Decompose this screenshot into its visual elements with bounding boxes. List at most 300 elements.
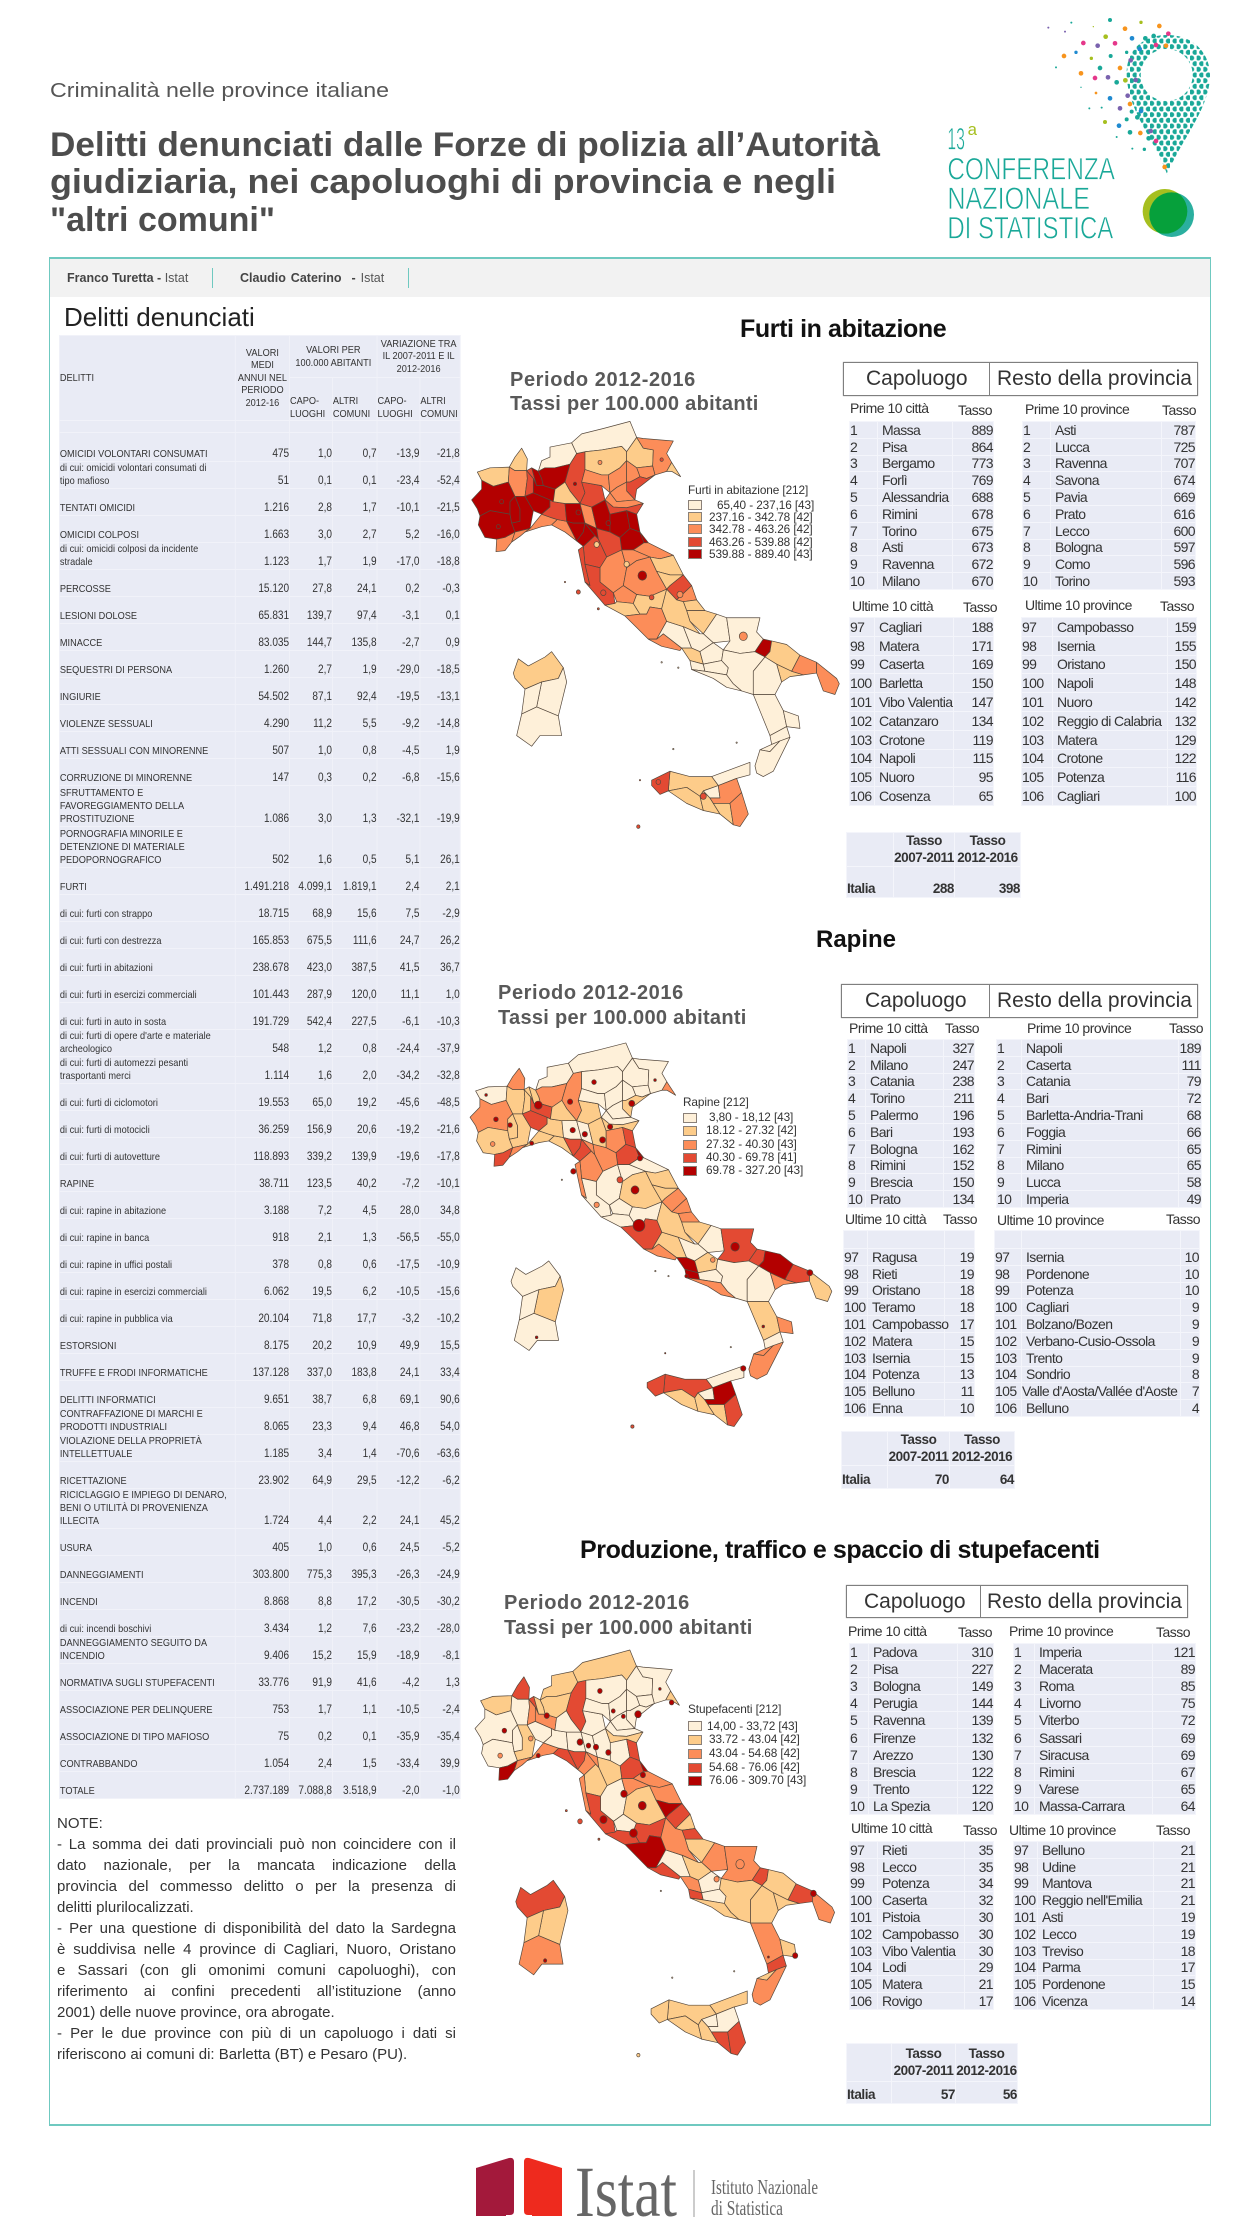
table: prime 10 province rapine: Foggia [1026, 1124, 1065, 1140]
table: prime 10 province stupefacenti: 65 [1181, 1781, 1195, 1797]
table: prime 10 città rapine: 162 [952, 1141, 974, 1157]
table: delitti denunciati: -2,7 [402, 637, 420, 649]
table: delitti denunciati: 1,9 [363, 664, 377, 676]
table: delitti denunciati: 7,5 [406, 908, 420, 920]
map caption: stupefacenti: Periodo 2012-2016 [504, 1592, 690, 1614]
table: ultime 10 province furti: Cagliari [1057, 788, 1100, 804]
table: prime 10 province furti [1022, 421, 1196, 590]
table: ultime 10 province furti: 100 [1174, 788, 1196, 804]
table: prime 10 province stupefacenti: 6 [1014, 1730, 1021, 1746]
headers: prime 10 furti [850, 400, 1196, 418]
table: delitti denunciati: -13,9 [397, 448, 420, 460]
table: ultime 10 città rapine: 102 [844, 1333, 866, 1349]
table: delitti denunciati: -14,8 [437, 718, 460, 730]
notes: e Sassari (con gli omonimi comuni capoluoghi), con [57, 1962, 456, 1979]
table: ultime 10 province stupefacenti: 14 [1181, 1993, 1195, 2009]
table: delitti denunciati: 2,1 [318, 1232, 332, 1244]
table: prime 10 province stupefacenti: Roma [1039, 1678, 1074, 1694]
table: ultime 10 province rapine: Sondrio [1026, 1366, 1070, 1382]
table: ultime 10 province stupefacenti: Asti [1042, 1909, 1063, 1925]
table: prime 10 province rapine: 2 [997, 1057, 1004, 1073]
table: prime 10 città stupefacenti: 7 [850, 1747, 857, 1763]
table: prime 10 province furti: 616 [1173, 506, 1195, 522]
table: delitti denunciati: 91,9 [312, 1677, 332, 1689]
table: prime 10 città rapine: 211 [953, 1090, 974, 1106]
table: ultime 10 città rapine [843, 1230, 975, 1417]
table: delitti denunciati: 137.128 [253, 1367, 289, 1379]
headers: ultime 10 furti: Tasso [963, 599, 997, 615]
table: ultime 10 province furti: 132 [1174, 713, 1196, 729]
map caption: furti [510, 369, 759, 415]
headers: ultime 10 rapine: Ultime 10 città [845, 1211, 926, 1227]
table: delitti denunciati: 1.724 [264, 1515, 289, 1527]
headers: ultime 10 stupefacenti: Tasso [1156, 1822, 1190, 1838]
table: prime 10 città furti: 1 [850, 422, 857, 438]
table: delitti denunciati: 542,4 [307, 1016, 332, 1028]
table: delitti denunciati: -55,0 [437, 1232, 460, 1244]
table: prime 10 città furti: 3 [850, 455, 857, 471]
table: delitti denunciati: -10,5 [397, 1286, 420, 1298]
table: delitti denunciati: VARIAZIONE TRA [381, 338, 456, 350]
table: ultime 10 città stupefacenti: 105 [850, 1976, 872, 1992]
table: delitti denunciati: CONTRAFFAZIONE DI MARCHI E [60, 1408, 203, 1420]
table: prime 10 città rapine: Milano [870, 1057, 908, 1073]
table: prime 10 città rapine: 4 [848, 1090, 855, 1106]
table: ultime 10 città stupefacenti: 103 [850, 1943, 872, 1959]
table: prime 10 province stupefacenti: 72 [1181, 1712, 1195, 1728]
table: ultime 10 città stupefacenti: Matera [882, 1976, 922, 1992]
map: furti in abitazione [471, 421, 840, 829]
table: delitti denunciati: 1,6 [318, 1070, 332, 1082]
table: ultime 10 città rapine: 15 [960, 1333, 974, 1349]
table: prime 10 province stupefacenti: 75 [1181, 1695, 1195, 1711]
table: prime 10 città furti: Torino [882, 523, 917, 539]
table: delitti denunciati: di cui: furti in esercizi commerciali [60, 989, 197, 1001]
table: delitti denunciati: 29,5 [357, 1475, 377, 1487]
table: ultime 10 province furti: 100 [1022, 675, 1044, 691]
table: prime 10 città furti: 8 [850, 539, 857, 555]
table: prime 10 città stupefacenti: Ravenna [873, 1712, 925, 1728]
table: ultime 10 province rapine: 4 [1192, 1400, 1199, 1416]
table: delitti denunciati: 2,7 [318, 664, 332, 676]
table: tasso italia stupefacenti: 56 [1003, 2086, 1017, 2102]
table: prime 10 città stupefacenti: Brescia [873, 1764, 915, 1780]
table: delitti denunciati: -10,1 [437, 1178, 460, 1190]
table: prime 10 province furti: Prato [1055, 506, 1085, 522]
table: prime 10 città rapine: 193 [952, 1124, 974, 1140]
table: delitti denunciati: 8.868 [264, 1596, 289, 1608]
table: ultime 10 città furti: Crotone [879, 732, 925, 748]
table: prime 10 province stupefacenti: 5 [1014, 1712, 1021, 1728]
notes: dato nazionale, per la mancata indicazione della [57, 1857, 456, 1874]
table: prime 10 province rapine: Catania [1026, 1073, 1070, 1089]
table: ultime 10 città furti: 105 [850, 769, 872, 785]
table: ultime 10 città furti: 98 [850, 638, 864, 654]
table: delitti denunciati: 1,0 [446, 989, 460, 1001]
logo: istat: di Statistica [711, 2196, 783, 2220]
table: ultime 10 province stupefacenti: 21 [1181, 1859, 1195, 1875]
map caption: rapine [498, 982, 747, 1029]
table: ultime 10 province rapine: Valle d'Aosta/Vallée d'Aoste [1022, 1383, 1177, 1399]
table: delitti denunciati: 2,7 [363, 529, 377, 541]
table: delitti denunciati: -33,4 [397, 1758, 420, 1770]
table: prime 10 città stupefacenti: Perugia [873, 1695, 917, 1711]
table: delitti denunciati: 3,4 [318, 1448, 332, 1460]
table: delitti denunciati: 139,7 [307, 610, 332, 622]
table: prime 10 province stupefacenti: 1 [1014, 1644, 1021, 1660]
table: prime 10 città furti: 773 [971, 455, 993, 471]
legend: furti [688, 483, 814, 561]
table: delitti denunciati: ILLECITA [60, 1515, 99, 1527]
table: ultime 10 città stupefacenti: 35 [979, 1859, 993, 1875]
table: ultime 10 province rapine [994, 1230, 1200, 1417]
table: prime 10 province furti: Como [1055, 556, 1090, 572]
table: tasso italia furti: Italia [847, 880, 875, 896]
legend: rapine: Rapine [212] [683, 1095, 749, 1109]
table: prime 10 province stupefacenti: Rimini [1039, 1764, 1074, 1780]
table: prime 10 province stupefacenti: 10 [1014, 1798, 1028, 1814]
table: prime 10 città rapine: 134 [952, 1191, 974, 1207]
table: delitti denunciati: 2,8 [318, 502, 332, 514]
table: ultime 10 città furti: 119 [972, 732, 993, 748]
table: delitti denunciati: 405 [272, 1542, 289, 1554]
table: delitti denunciati: 0,1 [318, 475, 332, 487]
table: ultime 10 province stupefacenti: Pordenone [1042, 1976, 1105, 1992]
table: delitti denunciati: 3,0 [318, 529, 332, 541]
table: tasso italia furti: 2007-2011 [894, 850, 954, 864]
table: prime 10 province rapine: Barletta-Andria-Trani [1026, 1107, 1143, 1123]
table: ultime 10 province stupefacenti [1013, 1841, 1196, 2010]
table: prime 10 città stupefacenti: 122 [971, 1764, 993, 1780]
table: delitti denunciati: ASSOCIAZIONE PER DELINQUERE [60, 1704, 213, 1716]
table: delitti denunciati: RAPINE [60, 1178, 94, 1190]
table: ultime 10 province stupefacenti: 17 [1181, 1959, 1195, 1975]
table: delitti denunciati: -30,5 [397, 1596, 420, 1608]
table: tasso italia rapine: 2012-2016 [952, 1448, 1012, 1464]
table: delitti denunciati: -4,2 [402, 1677, 420, 1689]
table: ultime 10 province furti: 97 [1022, 619, 1036, 635]
legend: rapine [683, 1095, 803, 1177]
legend: stupefacenti: 33.72 - 43.04 [42] [709, 1732, 800, 1746]
table: delitti denunciati: di cui: rapine in banca [60, 1232, 149, 1244]
table: ultime 10 province rapine: 9 [1192, 1316, 1199, 1332]
table: ultime 10 province stupefacenti: 21 [1181, 1875, 1195, 1891]
table: prime 10 province furti: 10 [1023, 573, 1037, 589]
table: tasso italia furti [846, 832, 1021, 898]
icon: map pin of dots [1127, 35, 1210, 175]
table: delitti denunciati: 8.065 [264, 1421, 289, 1433]
table: delitti denunciati: 3,0 [318, 813, 332, 825]
table: ultime 10 città rapine: 103 [844, 1350, 866, 1366]
table: ultime 10 province furti: Isernia [1057, 638, 1095, 654]
table: delitti denunciati: 918 [272, 1232, 289, 1244]
table: tasso italia rapine: Tasso [901, 1432, 936, 1447]
table: delitti denunciati: COMUNI [420, 408, 458, 420]
table: tasso italia stupefacenti: Italia [847, 2086, 875, 2102]
table: ultime 10 città furti: 147 [971, 694, 993, 710]
legend: furti: 463.26 - 539.88 [42] [709, 535, 813, 549]
table: delitti denunciati: 54.502 [258, 691, 289, 703]
table: ultime 10 città furti: 106 [850, 788, 872, 804]
table: ultime 10 città rapine: Isernia [872, 1350, 910, 1366]
table: ultime 10 città stupefacenti: Vibo Valentia [882, 1943, 955, 1959]
table: ultime 10 province stupefacenti: Vicenza [1042, 1993, 1087, 2009]
table: prime 10 città furti: Pisa [882, 439, 907, 455]
table: delitti denunciati: 6,2 [363, 1286, 377, 1298]
notes: - Per le due province con più di un capoluogo i dati si [57, 2025, 456, 2042]
table: delitti denunciati: 2,0 [363, 1070, 377, 1082]
legend: stupefacenti [688, 1702, 806, 1787]
table: delitti denunciati: -3,1 [402, 610, 420, 622]
table: delitti denunciati: 34,8 [440, 1205, 460, 1217]
table: ultime 10 province furti: Potenza [1057, 769, 1104, 785]
table: ultime 10 città stupefacenti: Rieti [882, 1842, 907, 1858]
table: delitti denunciati: 1.123 [264, 556, 289, 568]
table: prime 10 province furti: Asti [1055, 422, 1076, 438]
table: ultime 10 province rapine: 10 [1185, 1282, 1199, 1298]
logo: conferenza nazionale di statistica [947, 18, 1210, 245]
table: delitti denunciati: 1.663 [264, 529, 289, 541]
title: Delitti denunciati dalle Forze di polizia all’Autorità [50, 126, 880, 164]
table: ultime 10 città stupefacenti: 32 [979, 1892, 993, 1908]
table: delitti denunciati: 101.443 [253, 989, 289, 1001]
table: tasso italia rapine: Italia [842, 1472, 870, 1486]
table: tasso italia furti: 398 [999, 880, 1020, 896]
table: ultime 10 province stupefacenti: 19 [1181, 1909, 1195, 1925]
table: ultime 10 città rapine: 105 [844, 1383, 866, 1399]
table: delitti denunciati: 54,0 [440, 1421, 460, 1433]
table: prime 10 province furti: 707 [1173, 455, 1195, 471]
table: delitti denunciati: -0,3 [442, 583, 460, 595]
table: delitti denunciati: DANNEGGIAMENTO SEGUITO DA [60, 1637, 207, 1649]
table: ultime 10 città stupefacenti: 30 [979, 1909, 993, 1925]
table: prime 10 province stupefacenti: 69 [1181, 1747, 1195, 1763]
table: delitti denunciati: 36,7 [440, 962, 460, 974]
table: tasso italia furti: Tasso [906, 833, 942, 848]
table: prime 10 province furti: 7 [1023, 523, 1030, 539]
table: ultime 10 province rapine: Belluno [1026, 1400, 1069, 1416]
table: delitti denunciati: 1,4 [363, 1448, 377, 1460]
table: ultime 10 province rapine: Pordenone [1026, 1266, 1089, 1282]
table: ultime 10 province rapine: 101 [995, 1316, 1017, 1332]
authors strip: Claudio Caterino - Istat [240, 271, 384, 285]
table: prime 10 province furti: 725 [1173, 439, 1195, 455]
table: delitti denunciati: -19,9 [437, 813, 460, 825]
map: stupefacenti [474, 1650, 835, 2058]
table: ultime 10 province stupefacenti: Udine [1042, 1859, 1076, 1875]
table: delitti denunciati: di cui: furti di autovetture [60, 1151, 160, 1163]
table: delitti denunciati: LUOGHI [378, 408, 413, 420]
table: ultime 10 città furti: 134 [971, 713, 993, 729]
map caption: furti: Periodo 2012-2016 [510, 369, 696, 391]
table: ultime 10 province rapine: 97 [995, 1249, 1009, 1265]
table: delitti denunciati: -10,9 [437, 1259, 460, 1271]
table: prime 10 province furti: 597 [1173, 539, 1195, 555]
legend: furti: 65,40 - 237,16 [43] [717, 498, 814, 512]
table: tasso italia stupefacenti: Tasso [969, 2046, 1004, 2061]
table: delitti denunciati: RICICLAGGIO E IMPIEGO DI DENARO, [60, 1489, 227, 1501]
button: capoluogo resto della provincia [843, 362, 1198, 396]
table: ultime 10 province stupefacenti: Parma [1042, 1959, 1080, 1975]
table: delitti denunciati: 339,2 [307, 1151, 332, 1163]
table: prime 10 città rapine: Rimini [870, 1157, 905, 1173]
table: delitti denunciati: 502 [272, 854, 289, 866]
table: ultime 10 province furti: 142 [1174, 694, 1196, 710]
table: delitti denunciati: 1.185 [264, 1448, 289, 1460]
table: delitti denunciati: -70,6 [397, 1448, 420, 1460]
table: ultime 10 città rapine: 18 [960, 1282, 974, 1298]
table: delitti denunciati: 41,5 [400, 962, 420, 974]
table: ultime 10 province rapine: Trento [1026, 1350, 1062, 1366]
table: prime 10 province furti: 2 [1023, 439, 1030, 455]
table: ultime 10 città rapine: 104 [844, 1366, 866, 1382]
table: delitti denunciati: 15,2 [312, 1650, 332, 1662]
notes: riferimento ai confini precedenti all’istituzione (anno [57, 1983, 456, 2000]
table: delitti denunciati: di cui: furti con strappo [60, 908, 152, 920]
table: delitti denunciati: -18,8 [437, 556, 460, 568]
headers: prime 10 stupefacenti: Tasso [958, 1624, 992, 1640]
table: prime 10 province furti: 669 [1173, 489, 1195, 505]
table: prime 10 province stupefacenti: Viterbo [1039, 1712, 1079, 1728]
table: prime 10 città rapine: 2 [848, 1057, 855, 1073]
table: delitti denunciati: 1,2 [318, 1623, 332, 1635]
table: delitti denunciati: VALORI [246, 347, 279, 359]
table: delitti denunciati: 1,5 [363, 1758, 377, 1770]
table: ultime 10 province rapine: Verbano-Cusio-Ossola [1026, 1333, 1155, 1349]
table: ultime 10 città stupefacenti: 98 [850, 1859, 864, 1875]
table: ultime 10 province rapine: Potenza [1026, 1282, 1073, 1298]
headers: ultime 10 furti: Ultime 10 città [852, 598, 933, 614]
table: prime 10 città stupefacenti: Bologna [873, 1678, 920, 1694]
table: ultime 10 province stupefacenti: 101 [1014, 1909, 1036, 1925]
table: delitti denunciati: 9,4 [363, 1421, 377, 1433]
table: ultime 10 province stupefacenti: Treviso [1042, 1943, 1083, 1959]
table: delitti denunciati: INTELLETTUALE [60, 1448, 132, 1460]
table: prime 10 città furti: 864 [971, 439, 993, 455]
table: ultime 10 province stupefacenti: Lecco [1042, 1926, 1076, 1942]
table: delitti denunciati: 507 [272, 745, 289, 757]
table: delitti denunciati: -6,8 [402, 772, 420, 784]
table: ultime 10 città stupefacenti: 30 [979, 1943, 993, 1959]
panel border [49, 257, 1211, 2126]
table: prime 10 città furti: 889 [971, 422, 993, 438]
table: delitti denunciati: 8.175 [264, 1340, 289, 1352]
legend: furti: 237.16 - 342.78 [42] [709, 510, 813, 524]
table: prime 10 province furti: 3 [1023, 455, 1030, 471]
table: prime 10 province furti: Bologna [1055, 539, 1102, 555]
table: ultime 10 province stupefacenti: 103 [1014, 1943, 1036, 1959]
table: delitti denunciati: 24,1 [400, 1367, 420, 1379]
headers: ultime 10 rapine: Ultime 10 province [997, 1212, 1104, 1228]
headers: prime 10 rapine: Tasso [945, 1020, 979, 1036]
table: delitti denunciati: di cui: furti di ciclomotori [60, 1097, 158, 1109]
table: ultime 10 città furti: 102 [850, 713, 872, 729]
table: delitti denunciati: -37,9 [437, 1043, 460, 1055]
table: delitti denunciati: 1,3 [363, 1232, 377, 1244]
table: delitti denunciati: 378 [272, 1259, 289, 1271]
table: prime 10 città stupefacenti: Trento [873, 1781, 909, 1797]
table: delitti denunciati: VIOLENZE SESSUALI [60, 718, 153, 730]
button: capoluogo resto della provincia: Capoluogo [864, 1590, 966, 1612]
conference name text: CONFERENZA [947, 150, 1116, 186]
table: delitti denunciati: -4,5 [402, 745, 420, 757]
table: prime 10 città furti: 688 [971, 489, 993, 505]
table: ultime 10 province furti: Campobasso [1057, 619, 1134, 635]
table: tasso italia furti: 2012-2016 [957, 850, 1018, 864]
heading: produzione traffico e spaccio di stupefacenti: Produzione, traffico e spaccio di stupefacenti [580, 1536, 1100, 1564]
table: prime 10 province furti: Lucca [1055, 439, 1089, 455]
table: delitti denunciati: 2012-16 [246, 397, 279, 409]
table: ultime 10 città furti: Nuoro [879, 769, 914, 785]
table: delitti denunciati: 5,5 [363, 718, 377, 730]
table: prime 10 città stupefacenti: Arezzo [873, 1747, 913, 1763]
table: prime 10 province rapine: 6 [997, 1124, 1004, 1140]
table: delitti denunciati: 548 [272, 1043, 289, 1055]
table: prime 10 città rapine: 150 [952, 1174, 974, 1190]
table: ultime 10 città rapine: 106 [844, 1400, 866, 1416]
notes [57, 1815, 456, 2063]
table: prime 10 città stupefacenti: 1 [850, 1644, 857, 1660]
table: ultime 10 città furti: Catanzaro [879, 713, 938, 729]
table: prime 10 città rapine: Palermo [870, 1107, 918, 1123]
headers: ultime 10 furti: Tasso [1160, 598, 1194, 614]
table: ultime 10 province furti: Nuoro [1057, 694, 1092, 710]
table: delitti denunciati: ANNUI NEL [238, 372, 287, 384]
table: delitti denunciati: 111,6 [353, 935, 377, 947]
table: delitti denunciati: 64,9 [312, 1475, 332, 1487]
table: prime 10 province rapine: 72 [1187, 1090, 1201, 1106]
table: delitti denunciati: 46,8 [400, 1421, 420, 1433]
table: delitti denunciati: 287,9 [307, 989, 332, 1001]
table: ultime 10 province furti: Crotone [1057, 750, 1103, 766]
table: delitti denunciati: 5,1 [406, 854, 420, 866]
table: delitti denunciati: 65.831 [258, 610, 289, 622]
table: ultime 10 città stupefacenti: 34 [979, 1875, 993, 1891]
table: prime 10 città stupefacenti: 310 [971, 1644, 993, 1660]
legend: stupefacenti: 14,00 - 33,72 [43] [707, 1719, 798, 1733]
table: ultime 10 città rapine: Rieti [872, 1266, 897, 1282]
table: ultime 10 province furti: 105 [1022, 769, 1044, 785]
table: prime 10 province rapine: 49 [1187, 1191, 1201, 1207]
table: delitti denunciati: 87,1 [312, 691, 332, 703]
table: delitti denunciati: -21,5 [437, 502, 460, 514]
table: ultime 10 città rapine: 11 [961, 1383, 974, 1399]
table: prime 10 città rapine: 7 [848, 1141, 855, 1157]
table: delitti denunciati: ESTORSIONI [60, 1340, 116, 1352]
table: prime 10 città stupefacenti: 122 [971, 1781, 993, 1797]
table: delitti denunciati: 4.099,1 [298, 881, 332, 893]
table: delitti denunciati: 0,1 [363, 1731, 377, 1743]
legend: rapine: 18.12 - 27.32 [42] [706, 1123, 797, 1137]
table: ultime 10 città stupefacenti: 35 [979, 1842, 993, 1858]
table: delitti denunciati: -2,0 [402, 1785, 420, 1797]
table: delitti denunciati: IL 2007-2011 E IL [383, 350, 455, 362]
table: ultime 10 città rapine: Oristano [872, 1282, 920, 1298]
table: ultime 10 province rapine: 10 [1185, 1249, 1199, 1265]
table: delitti denunciati: -32,8 [437, 1070, 460, 1082]
table: delitti denunciati: LESIONI DOLOSE [60, 610, 137, 622]
map: rapine [470, 1042, 832, 1429]
table: ultime 10 province stupefacenti: 97 [1014, 1842, 1028, 1858]
legend: furti: 342.78 - 463.26 [42] [709, 522, 813, 536]
table: delitti denunciati: -26,3 [397, 1569, 420, 1581]
table: delitti denunciati: 1.260 [264, 664, 289, 676]
table: delitti denunciati: -8,1 [442, 1650, 460, 1662]
table: delitti denunciati: DETENZIONE DI MATERIALE [60, 841, 185, 853]
conference name text: a [968, 120, 978, 139]
table: delitti denunciati: 28,0 [400, 1205, 420, 1217]
table: prime 10 province stupefacenti [1013, 1643, 1196, 1815]
